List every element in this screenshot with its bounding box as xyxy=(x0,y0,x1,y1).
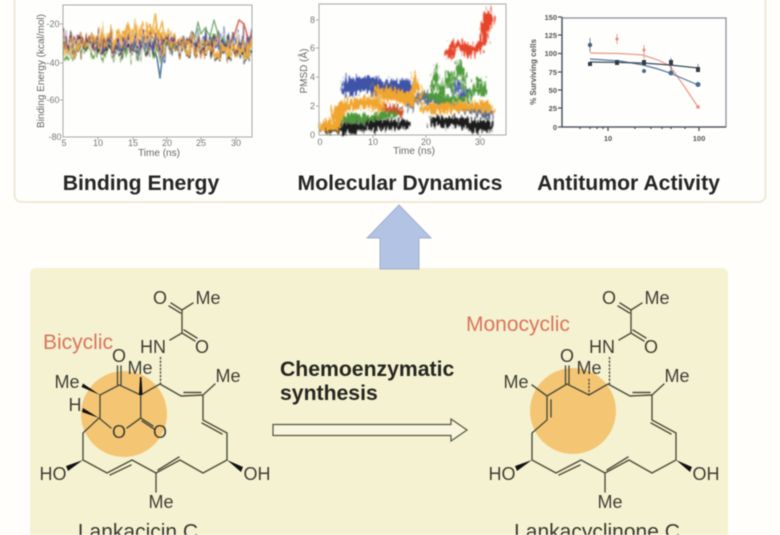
molecule: lankacyclinone C: O xyxy=(644,337,658,357)
chart: binding energy: -40 xyxy=(46,58,60,68)
chart: molecular dynamics: 8 xyxy=(310,15,315,25)
chart: molecular dynamics: 4 xyxy=(310,72,315,82)
text: chemoenzymatic synthesis: Chemoenzymatic xyxy=(280,358,454,381)
molecule: lankacicin C: Me xyxy=(54,372,80,392)
chart: binding energy: Time (ns) xyxy=(138,148,180,159)
chart: antitumor activity: 125 xyxy=(544,31,557,40)
molecule: lankacicin C: Me xyxy=(148,492,174,512)
heading: antitumor activity: Antitumor Activity xyxy=(537,172,720,195)
chart: molecular dynamics: PMSD (Å) xyxy=(297,48,310,94)
molecule: lankacicin C: HO xyxy=(40,464,66,484)
molecule: lankacicin C: H xyxy=(68,395,82,415)
molecule: lankacicin C: O xyxy=(112,422,126,442)
molecule: lankacyclinone C: HN xyxy=(589,337,615,357)
chart: molecular dynamics: 20 xyxy=(421,137,431,147)
chart: molecular dynamics: 2 xyxy=(310,101,315,111)
chart: binding energy: 5 xyxy=(61,138,67,148)
chart: antitumor activity: 75 xyxy=(549,68,557,77)
chart: binding energy: -60 xyxy=(46,95,60,105)
chart: molecular dynamics: Time (ns) xyxy=(393,146,435,157)
chart: antitumor activity: 150 xyxy=(544,13,557,22)
molecule: lankacyclinone C: Me xyxy=(503,372,529,392)
text: chemoenzymatic synthesis: synthesis xyxy=(280,382,378,405)
molecule: lankacicin C: O xyxy=(153,422,167,442)
chart: binding energy: 15 xyxy=(128,138,138,148)
chart: molecular dynamics: 6 xyxy=(310,43,315,53)
molecule: lankacicin C: Me xyxy=(215,366,241,386)
chart: molecular dynamics xyxy=(297,4,506,157)
molecule: lankacicin C: O xyxy=(153,288,167,308)
label: bicyclic: Bicyclic xyxy=(43,331,113,354)
chart: molecular dynamics: 0 xyxy=(317,137,323,147)
arrow: chemoenzymatic conversion xyxy=(273,419,467,441)
chart: antitumor activity: 25 xyxy=(549,104,557,113)
chart: molecular dynamics: 30 xyxy=(475,137,485,147)
label: monocyclic: Monocyclic xyxy=(466,313,570,336)
chart: binding energy: -80 xyxy=(48,132,62,142)
molecule: lankacicin C xyxy=(40,288,270,512)
chart: binding energy: 20 xyxy=(162,138,172,148)
chart: antitumor activity: 100 xyxy=(693,134,705,143)
chart: antitumor activity: 0 xyxy=(553,123,557,132)
molecule: lankacyclinone C: Me xyxy=(664,366,690,386)
chart: binding energy: -20 xyxy=(46,19,60,29)
molecule: lankacicin C: HN xyxy=(140,337,166,357)
molecule: lankacicin C: O xyxy=(112,346,126,366)
molecule: lankacyclinone C: Me xyxy=(597,492,623,512)
icon: monocyclic highlight circle xyxy=(530,368,616,454)
chart: antitumor activity: 100 xyxy=(544,49,557,58)
molecule: lankacyclinone C xyxy=(488,288,720,512)
chart: antitumor activity: 50 xyxy=(549,86,557,95)
molecule: lankacicin C: Me xyxy=(195,288,221,308)
chart: antitumor activity: 10 xyxy=(604,134,612,143)
arrow: up to results xyxy=(367,205,431,269)
panel: results xyxy=(14,0,766,202)
chart: binding energy: 10 xyxy=(93,138,103,148)
molecule: lankacicin C: Me xyxy=(127,358,153,378)
icon: bicyclic highlight circle xyxy=(81,371,167,457)
chart: antitumor activity xyxy=(529,13,726,143)
chart: binding energy: 25 xyxy=(196,138,206,148)
molecule: lankacyclinone C: Me xyxy=(644,288,670,308)
heading: molecular dynamics: Molecular Dynamics xyxy=(298,172,502,195)
molecule: lankacyclinone C: OH xyxy=(692,464,720,484)
molecule: lankacyclinone C: HO xyxy=(488,464,516,484)
chart: binding energy: Binding Energy (kcal/mol) xyxy=(36,14,47,128)
molecule: lankacyclinone C: Me xyxy=(576,358,602,378)
molecule: lankacyclinone C: O xyxy=(560,346,574,366)
molecule: lankacicin C: OH xyxy=(244,464,270,484)
chart: molecular dynamics: 0 xyxy=(310,130,315,140)
molecule: lankacyclinone C: O xyxy=(602,288,616,308)
chart: binding energy: 30 xyxy=(231,138,241,148)
chart: antitumor activity: % Surviving cells xyxy=(529,39,538,105)
heading: binding energy: Binding Energy xyxy=(63,172,219,195)
chart: binding energy xyxy=(36,5,265,159)
molecule: lankacicin C: O xyxy=(195,337,209,357)
chart: molecular dynamics: 10 xyxy=(368,137,378,147)
panel: synthesis background xyxy=(30,268,728,535)
